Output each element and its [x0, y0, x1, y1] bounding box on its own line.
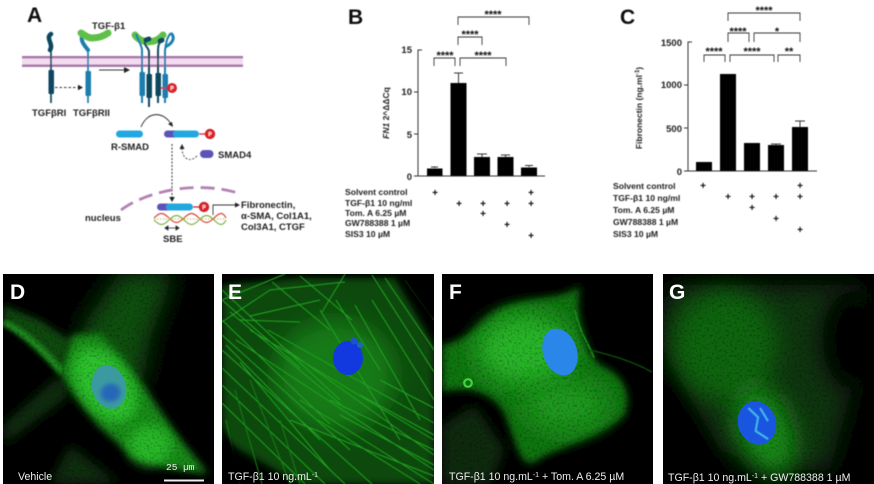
- scale bar label: 25 µm: [166, 462, 195, 473]
- caption F: TGF-β1 10 ng.mL: [449, 471, 533, 483]
- significance stars: ****: [474, 50, 492, 62]
- significance stars: ****: [755, 5, 773, 17]
- y axis title: Fibronectin (ng.ml: [634, 75, 644, 149]
- treatment plus marks: +: [456, 199, 462, 210]
- y tick labels: 5: [407, 130, 413, 141]
- treatment plus marks: +: [773, 192, 779, 203]
- significance stars: ****: [436, 50, 454, 62]
- significance stars: *: [775, 26, 780, 38]
- significance stars: ****: [461, 29, 479, 41]
- nuclear SMAD complex: P: [202, 205, 206, 211]
- treatment plus marks: +: [749, 192, 755, 203]
- bars: [427, 83, 537, 176]
- activated receptor complex: [135, 33, 173, 107]
- panel letter G: G: [669, 281, 685, 304]
- y axis title: -1: [635, 69, 641, 75]
- y axis title: FN1 2^ΔΔCq: [381, 87, 391, 139]
- treatment plus marks: +: [480, 199, 486, 210]
- y tick labels: [661, 38, 682, 178]
- axes and ticks: [684, 42, 817, 171]
- caption F: + Tom. A 6.25 µM: [539, 471, 624, 483]
- DNA helix: [154, 214, 226, 224]
- treatment labels: TGF-β1 10 ng/ml: [345, 198, 412, 208]
- significance stars: ****: [729, 26, 747, 38]
- panel: A signalling pathway diagram: [22, 4, 312, 245]
- y tick labels: 10: [401, 87, 412, 98]
- significance stars: ****: [705, 46, 723, 58]
- cell membrane: [22, 56, 243, 67]
- receptor TGFβRI: [48, 34, 54, 103]
- scale bar: [164, 480, 204, 482]
- treatment plus marks: +: [797, 181, 803, 192]
- treatment plus marks: +: [725, 192, 731, 203]
- panel letter D: D: [10, 281, 25, 304]
- y tick labels: 0: [677, 167, 682, 178]
- significance stars: [705, 5, 794, 58]
- panel letter B: B: [348, 6, 363, 29]
- treatment plus marks: +: [528, 188, 534, 199]
- label TGF-β1: TGF-β1: [92, 21, 126, 32]
- phosphate on complex: [161, 83, 177, 93]
- caption E: -1: [312, 472, 318, 479]
- significance stars: **: [785, 46, 794, 58]
- curved arrow: [141, 115, 173, 127]
- treatment labels: GW788388 1 µM: [613, 217, 678, 227]
- SMAD4 protein: [200, 150, 214, 158]
- treatment labels: Solvent control: [613, 181, 676, 191]
- treatment plus marks: +: [504, 220, 510, 231]
- nucleus G: [738, 401, 776, 445]
- label TGFβRI: TGFβRI: [32, 108, 66, 119]
- nucleus F: [542, 328, 578, 376]
- caption E: TGF-β1 10 ng.mL: [228, 471, 312, 483]
- panel letter A: A: [27, 4, 42, 27]
- caption Vehicle: Vehicle: [18, 471, 52, 483]
- label R-SMAD: R-SMAD: [111, 142, 149, 153]
- treatment plus marks: +: [749, 203, 755, 214]
- phosphorylated SMAD complex: P: [208, 132, 212, 138]
- treatment plus marks: +: [700, 181, 706, 192]
- treatment labels: Solvent control: [345, 187, 408, 197]
- panel: G GW788388 micrograph: [663, 274, 874, 484]
- treatment labels: Tom. A 6.25 µM: [345, 208, 406, 218]
- y tick labels: 15: [401, 45, 413, 56]
- label nucleus: nucleus: [85, 213, 121, 224]
- panel letter C: C: [620, 6, 635, 29]
- dashed arrow between receptors: [55, 85, 83, 90]
- treatment labels: GW788388 1 µM: [345, 218, 410, 228]
- target gene list: [241, 200, 312, 233]
- nucleus D: [92, 365, 126, 409]
- treatment labels: Tom. A 6.25 µM: [613, 205, 674, 215]
- nuclear SMAD complex: [157, 202, 209, 212]
- treatment plus marks: [432, 188, 534, 242]
- error bars: [771, 121, 805, 145]
- y tick labels: 1000: [661, 80, 682, 91]
- treatment plus marks: +: [528, 231, 534, 242]
- y tick labels: 1500: [661, 38, 682, 49]
- caption F: -1: [533, 472, 539, 479]
- panel: E TGF-β1 micrograph: [222, 274, 434, 484]
- panel letter F: F: [449, 281, 462, 304]
- SBE double arrow: [165, 226, 179, 230]
- significance brackets: [704, 13, 800, 62]
- dashed arrow from SMAD4: [180, 144, 197, 159]
- target gene list: Fibronectin,: [241, 200, 295, 211]
- caption G: -1: [752, 473, 758, 480]
- y axis title: ): [634, 67, 644, 70]
- error bars: [431, 73, 533, 168]
- treatment plus marks: +: [432, 188, 438, 199]
- significance stars: ****: [484, 9, 502, 21]
- label TGFβRII: TGFβRII: [73, 108, 110, 119]
- treatment plus marks: +: [797, 192, 803, 203]
- treatment labels: [345, 187, 412, 239]
- panel letter E: E: [228, 281, 242, 304]
- arrow to receptor complex: [99, 67, 130, 73]
- nucleus E: [333, 338, 363, 375]
- y tick labels: 0: [407, 172, 412, 183]
- treatment labels: TGF-β1 10 ng/ml: [613, 193, 680, 203]
- label SMAD4: SMAD4: [218, 150, 252, 161]
- transcription arrow: [213, 202, 240, 215]
- treatment plus marks: +: [480, 209, 486, 220]
- significance stars: [436, 9, 502, 62]
- R-SMAD protein: [116, 130, 143, 138]
- significance stars: ****: [743, 46, 761, 58]
- panel: F Tom. A micrograph: [442, 274, 653, 484]
- treatment plus marks: +: [797, 225, 803, 236]
- y tick labels: [401, 45, 413, 183]
- phosphate on complex: P: [170, 86, 174, 92]
- target gene list: Col3A1, CTGF: [241, 222, 305, 233]
- significance brackets: [434, 17, 529, 66]
- caption G: TGF-β1 10 ng.mL: [668, 472, 752, 484]
- treatment labels: [613, 181, 680, 239]
- bars: [696, 74, 808, 171]
- caption G: + GW788388 1 µM: [758, 472, 850, 484]
- panel: B FN1 expression bar chart: [345, 6, 545, 242]
- dashed arrow to nucleus: [169, 144, 175, 202]
- panel: C fibronectin bar chart: [613, 5, 817, 239]
- y tick labels: 500: [666, 124, 682, 135]
- panel: D vehicle micrograph: [3, 272, 214, 484]
- label SBE: SBE: [163, 234, 183, 245]
- treatment plus marks: [700, 181, 803, 236]
- ring vesicle: [464, 379, 472, 387]
- treatment labels: SIS3 10 µM: [345, 229, 390, 239]
- axes and ticks: [414, 50, 545, 176]
- treatment labels: SIS3 10 µM: [613, 229, 658, 239]
- actin-like fibres: [222, 274, 434, 484]
- target gene list: α-SMA, Col1A1,: [241, 211, 312, 222]
- treatment plus marks: +: [528, 199, 534, 210]
- treatment plus marks: +: [773, 214, 779, 225]
- receptor TGFβRII with ligand: [81, 33, 108, 103]
- phosphorylated SMAD complex: [164, 129, 215, 139]
- treatment plus marks: +: [504, 199, 510, 210]
- nuclear envelope: [121, 188, 238, 210]
